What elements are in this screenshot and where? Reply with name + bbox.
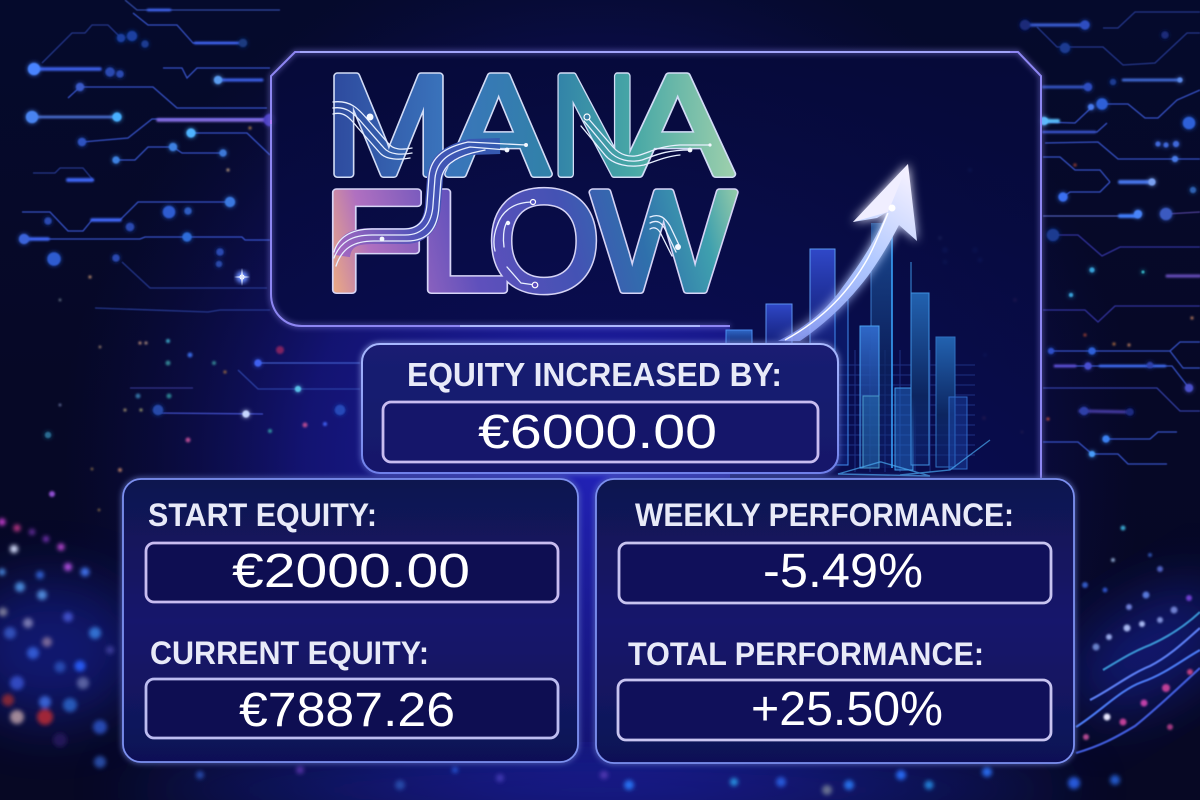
wordmark line 2: FLOW: [323, 162, 735, 321]
wordmark line 2: FLOW: O: [488, 162, 600, 321]
trace end nodes: [366, 114, 712, 288]
value box: total performance: [618, 680, 1051, 740]
heading: start equity: START EQUITY:: [148, 497, 377, 533]
particle wave: lower left: [0, 518, 114, 768]
glowing star: [234, 268, 250, 286]
wordmark line 1: MANA: M: [325, 46, 452, 205]
wordmark line 2: FLOW: W: [592, 162, 735, 321]
value box: equity increase: €6000.00: [478, 406, 717, 459]
arrow: growth arrow: [778, 164, 917, 341]
wordmark line 2: FLOW: O: [488, 162, 600, 321]
wordmark line 2: FLOW: F: [323, 162, 424, 321]
chart grid: [838, 350, 975, 472]
wordmark line 2: FLOW: W: [592, 162, 735, 321]
value box: start equity: €2000.00: [232, 545, 470, 598]
bright circuit segments: [24, 10, 1200, 412]
value box: total performance: +25.50%: [751, 683, 943, 736]
circuit traces on lettering: [333, 102, 710, 285]
wordmark line 2: FLOW: L: [418, 162, 509, 321]
value box: current equity: €7887.26: [239, 684, 455, 737]
background circuit nodes: [19, 20, 1196, 457]
wordmark line 1: MANA: N: [551, 46, 637, 205]
panel: equity: [123, 479, 578, 762]
wordmark line 1: MANA: A: [448, 46, 549, 205]
wordmark line 1: MANA: A: [448, 46, 549, 205]
background circuit traces: [22, 0, 1200, 464]
heading: weekly performance: WEEKLY PERFORMANCE:: [635, 497, 1014, 533]
heading: total performance: TOTAL PERFORMANCE:: [628, 636, 984, 672]
heading: current equity: CURRENT EQUITY:: [150, 635, 429, 671]
logo: MANA FLOW wordmark: [323, 46, 735, 321]
connector band between words: [342, 146, 500, 256]
value box: weekly performance: -5.49%: [763, 545, 923, 598]
wordmark line 1: MANA: A: [623, 46, 732, 205]
wordmark line 2: FLOW: F: [323, 162, 424, 321]
heading: equity increased by: EQUITY INCREASED BY:: [407, 356, 782, 393]
value box: start equity: [146, 543, 558, 602]
wordmark line 1: MANA: N: [551, 46, 637, 205]
value box: weekly performance: [619, 543, 1051, 603]
panel: performance: [596, 479, 1074, 763]
chart: rising bar chart: [726, 223, 990, 476]
value box: equity increase: [383, 402, 818, 462]
panel: logo frame: [270, 52, 1041, 478]
wordmark line 2: FLOW: L: [418, 162, 509, 321]
wordmark line 1: MANA: A: [623, 46, 732, 205]
panel: equity increased: [362, 344, 838, 473]
scattered particles: [49, 126, 1194, 511]
particle row: bottom edge: [196, 766, 1120, 795]
particle wave: lower right: [1076, 526, 1200, 753]
value box: current equity: [146, 679, 558, 738]
wordmark line 1: MANA: M: [325, 46, 452, 205]
wordmark line 1: MANA: [325, 46, 732, 205]
